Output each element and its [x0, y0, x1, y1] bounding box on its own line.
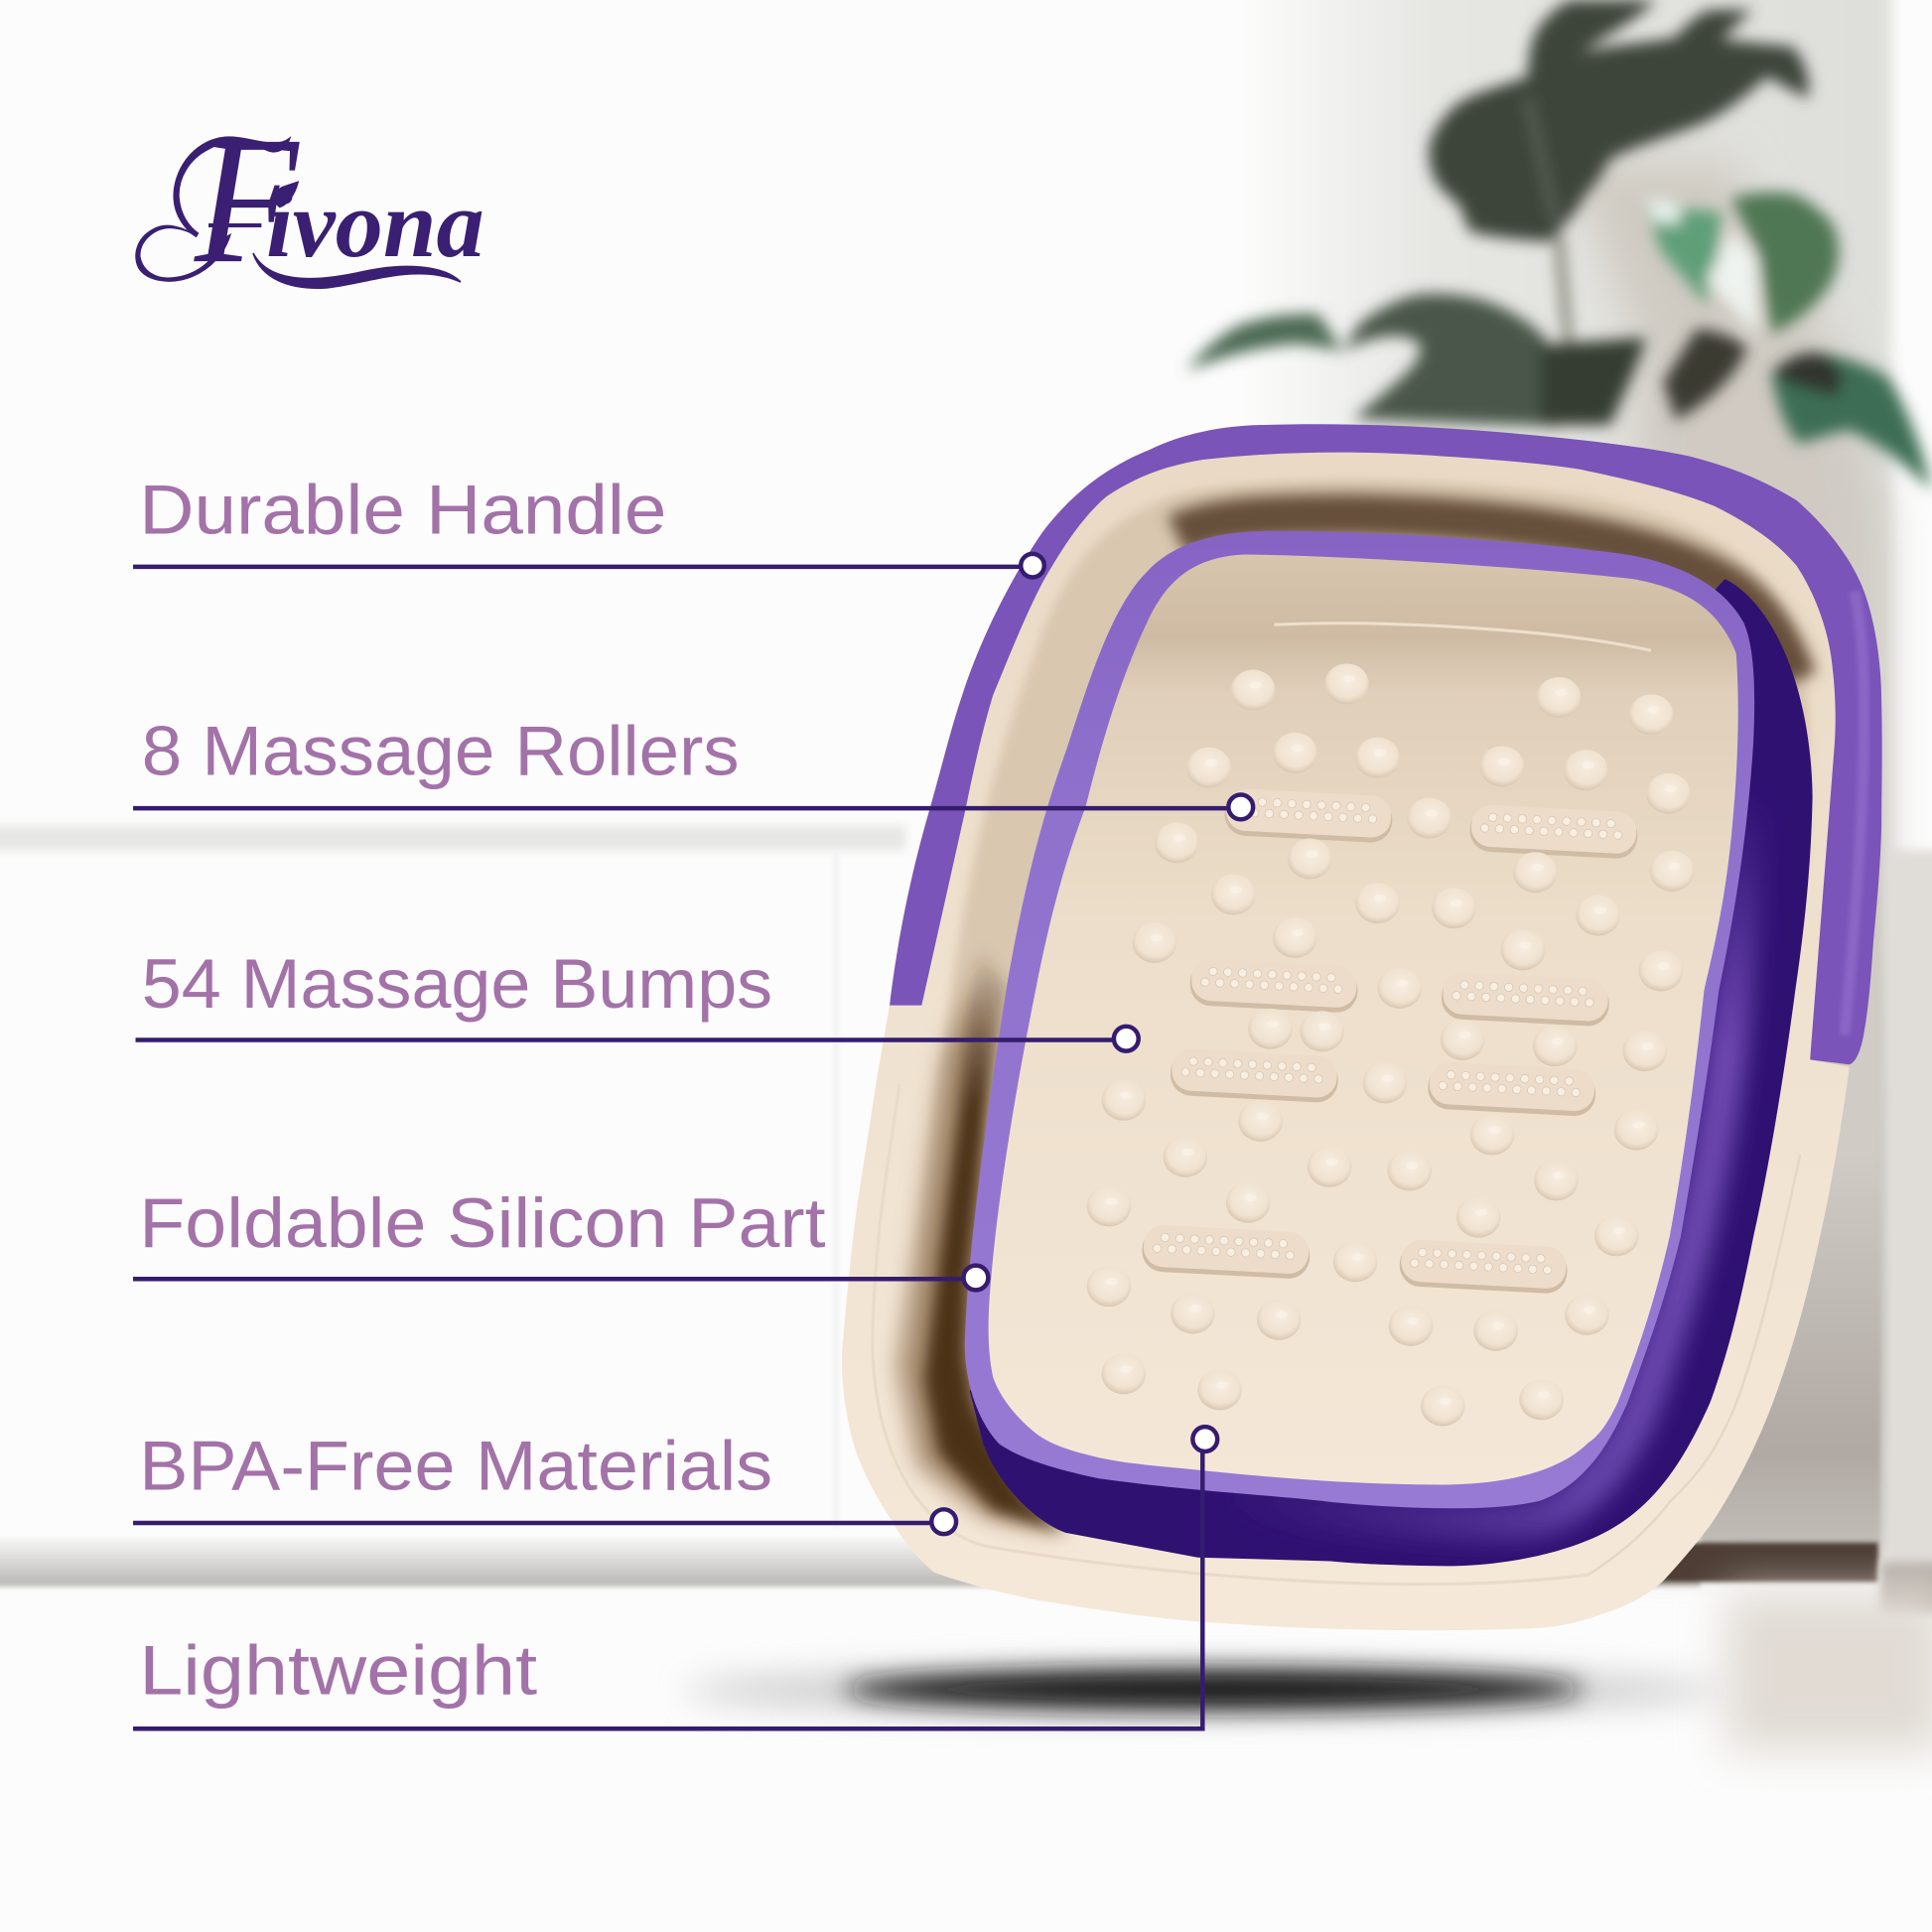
basin well: brown shadow top	[1176, 515, 1796, 680]
callout: Lightweight	[133, 1427, 1217, 1728]
callout: Foldable Silicon Part	[133, 1183, 988, 1290]
callout: 8 Massage Rollers	[133, 712, 1253, 819]
basin well: tan shade left	[897, 986, 1059, 1533]
basin well: tan interior	[919, 481, 1809, 1478]
basin well: brown shadow left	[924, 949, 1066, 1533]
callout: Lightweight: Lightweight	[139, 1630, 537, 1709]
light purple silicone rim	[965, 531, 1754, 1508]
logo: Fivona	[136, 98, 484, 301]
callout: 54 Massage Bumps: 54 Massage Bumps	[142, 944, 772, 1023]
callout: BPA-Free Materials: BPA-Free Materials	[139, 1426, 772, 1504]
tray floor	[989, 554, 1738, 1484]
callout: 8 Massage Rollers: 8 Massage Rollers	[142, 712, 740, 790]
outer basin	[842, 453, 1850, 1630]
callout: Foldable Silicon Part: Foldable Silicon Part	[139, 1183, 826, 1262]
product: foldable foot bath	[842, 424, 1882, 1630]
logo flourish	[135, 136, 461, 289]
massage bumps	[1087, 663, 1694, 1427]
logo: Fivona: F	[194, 98, 300, 301]
logo: Fivona: ivona	[266, 171, 484, 277]
plant: blurred leaves	[1186, 0, 1932, 490]
callout: 54 Massage Bumps	[136, 944, 1139, 1051]
callout: Durable Handle: Durable Handle	[139, 470, 666, 548]
massage rollers	[1141, 788, 1639, 1295]
callout: BPA-Free Materials	[133, 1426, 956, 1534]
floor shadow	[684, 1670, 1719, 1712]
outer handle	[890, 424, 1882, 1064]
callout: Durable Handle	[133, 470, 1044, 577]
dark purple tray body	[970, 579, 1813, 1566]
